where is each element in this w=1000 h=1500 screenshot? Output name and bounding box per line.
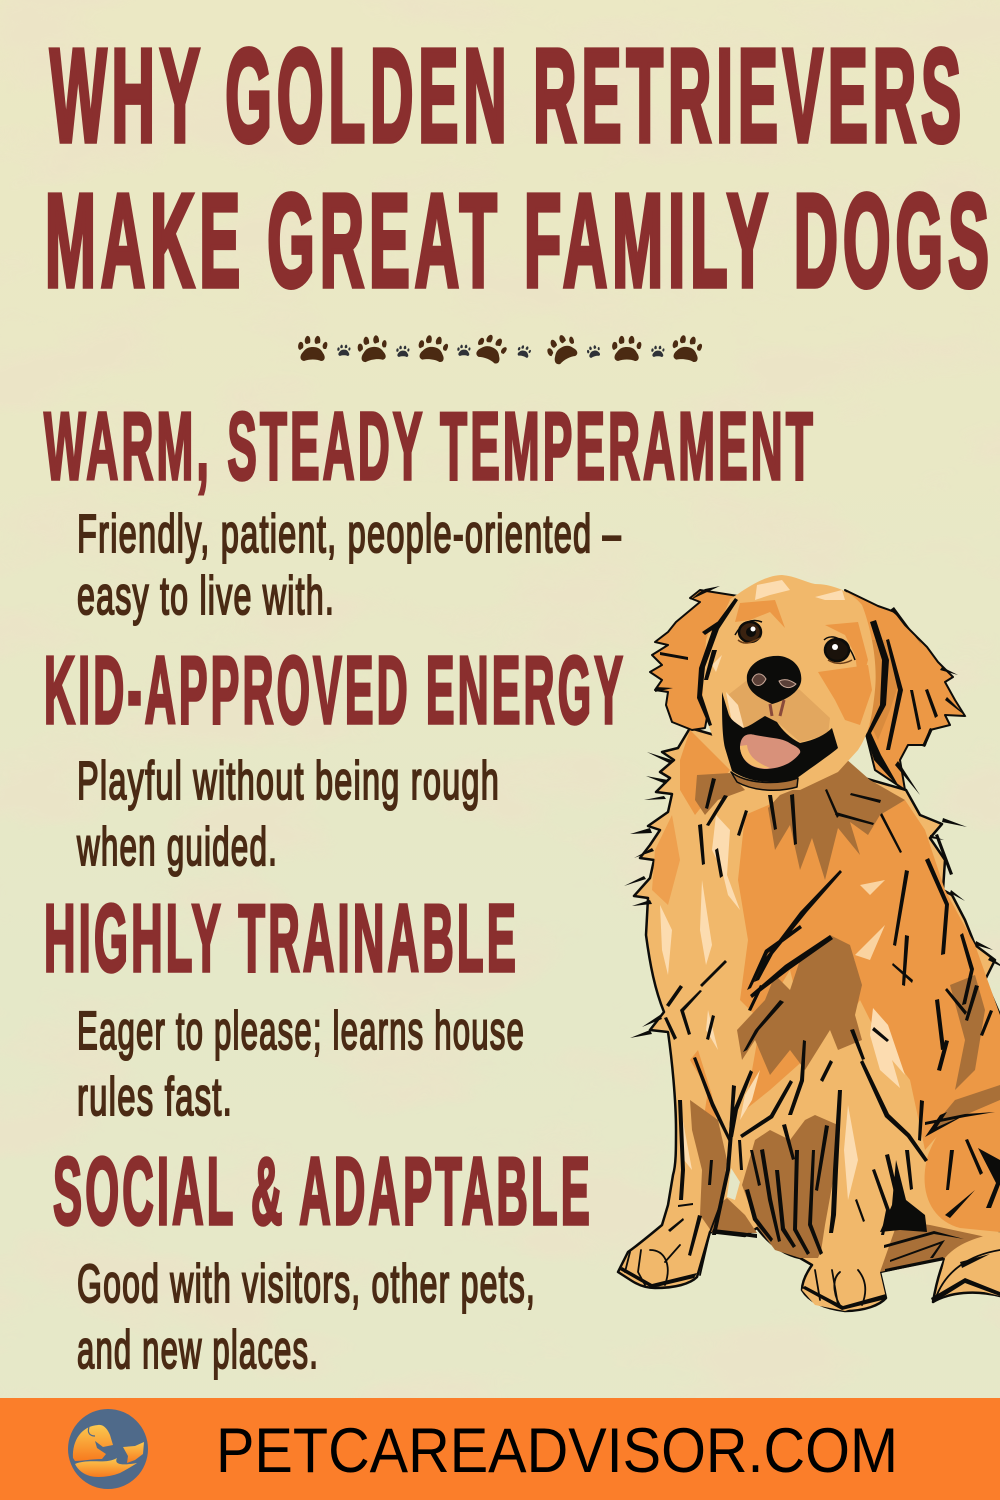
background gap between legs [727,1168,740,1200]
muzzle [728,670,830,742]
logo dog [73,1425,113,1461]
highlights [870,1008,905,1088]
logo cat [123,1442,144,1463]
ink fur strokes [620,752,1000,1310]
logo [68,1409,148,1489]
eyes [735,621,855,663]
body text: social: and new places. [77,1320,319,1380]
left ear [650,590,738,730]
body text: warm: Friendly, patient, people-oriented – [77,504,622,564]
body text: social: Good with visitors, other pets, [77,1254,536,1314]
website url: PETCAREADVISOR.COM [216,1416,898,1486]
black deep shadow [880,1160,927,1232]
section: warm, steady temperament [44,393,816,626]
fur: orange patches [738,800,1000,1150]
fur: brown shadows [695,758,905,880]
section: social and adaptable [53,1138,593,1380]
mouth [722,692,838,782]
title [45,22,994,314]
body text: trainable [77,1001,525,1127]
face shading [735,600,868,690]
tail [935,1232,1000,1300]
body text: kid: when guided. [76,817,278,877]
dog body [618,728,1000,1311]
logo hand [75,1458,137,1477]
paws [625,1200,1000,1308]
body text: trainable: rules fast. [77,1067,233,1127]
body text: warm: easy to live with. [77,566,335,626]
body text: kid [76,751,500,877]
body text: trainable: Eager to please; learns house [77,1001,525,1061]
body text: kid: Playful without being rough [77,751,500,811]
body text: social [77,1254,536,1380]
ear ink [655,586,967,795]
chin [731,772,798,790]
section: highly trainable [44,885,525,1127]
body text: warm [77,504,622,626]
dog head [650,575,967,795]
illustration: golden retriever [618,575,1000,1311]
haunch [925,1085,1000,1232]
section: kid-approved energy [44,637,626,877]
nose [747,656,801,704]
paw print divider [298,331,703,367]
face [702,575,876,790]
right foreleg [802,1084,908,1311]
footer band [0,1398,1000,1500]
right ear [845,590,965,790]
tongue [740,734,800,769]
